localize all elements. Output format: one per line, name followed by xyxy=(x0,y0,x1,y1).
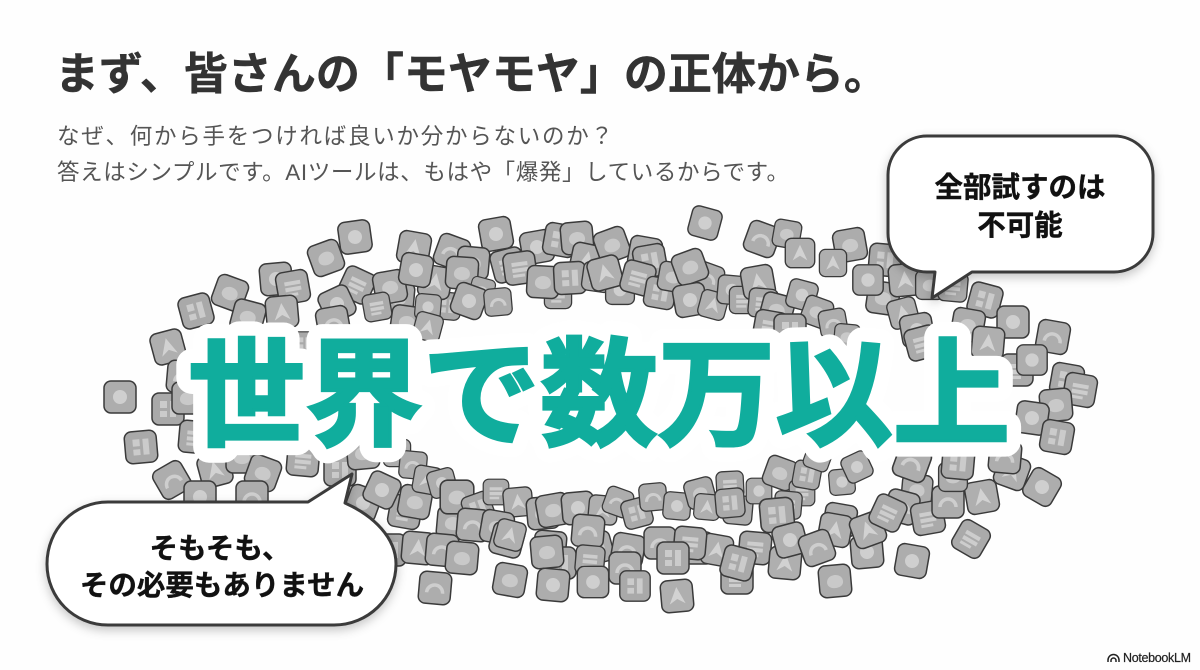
headline: huge teal number statement with white halo: 世界で数万以上 xyxy=(188,330,1010,461)
subtitle text block xyxy=(57,124,789,185)
tile group: upper left arc xyxy=(104,215,613,454)
speech bubble: bottom left: そもそも、 xyxy=(149,533,291,565)
subtitle text block: なぜ、何から手をつければ良いか分からないのか？ xyxy=(57,124,613,149)
tile group: upper right arc xyxy=(585,204,1099,456)
speech bubble: top right xyxy=(888,136,1153,298)
tile group: lower right arc xyxy=(530,440,1064,613)
headline: huge teal number statement with white halo: 世界で数万以上 xyxy=(188,330,1010,461)
icon cloud: grey app tiles swarming in a ring xyxy=(104,204,1099,613)
tile group: lower left arc xyxy=(124,430,560,605)
subtitle text block: 答えはシンプルです。AIツールは、もはや「爆発」しているからです。 xyxy=(57,160,789,185)
speech bubble: bottom left xyxy=(47,474,396,625)
brand mark: NotebookLM: NotebookLM xyxy=(1123,651,1191,665)
speech bubble: top right: 全部試すのは xyxy=(934,172,1106,204)
speech bubble: top right: 不可能 xyxy=(977,210,1063,242)
icon: NotebookLM arcs xyxy=(1108,654,1119,662)
speech bubble: bottom left: その必要もありません xyxy=(80,570,364,602)
title: まず、皆さんの「モヤモヤ」の正体から。 xyxy=(55,50,888,99)
